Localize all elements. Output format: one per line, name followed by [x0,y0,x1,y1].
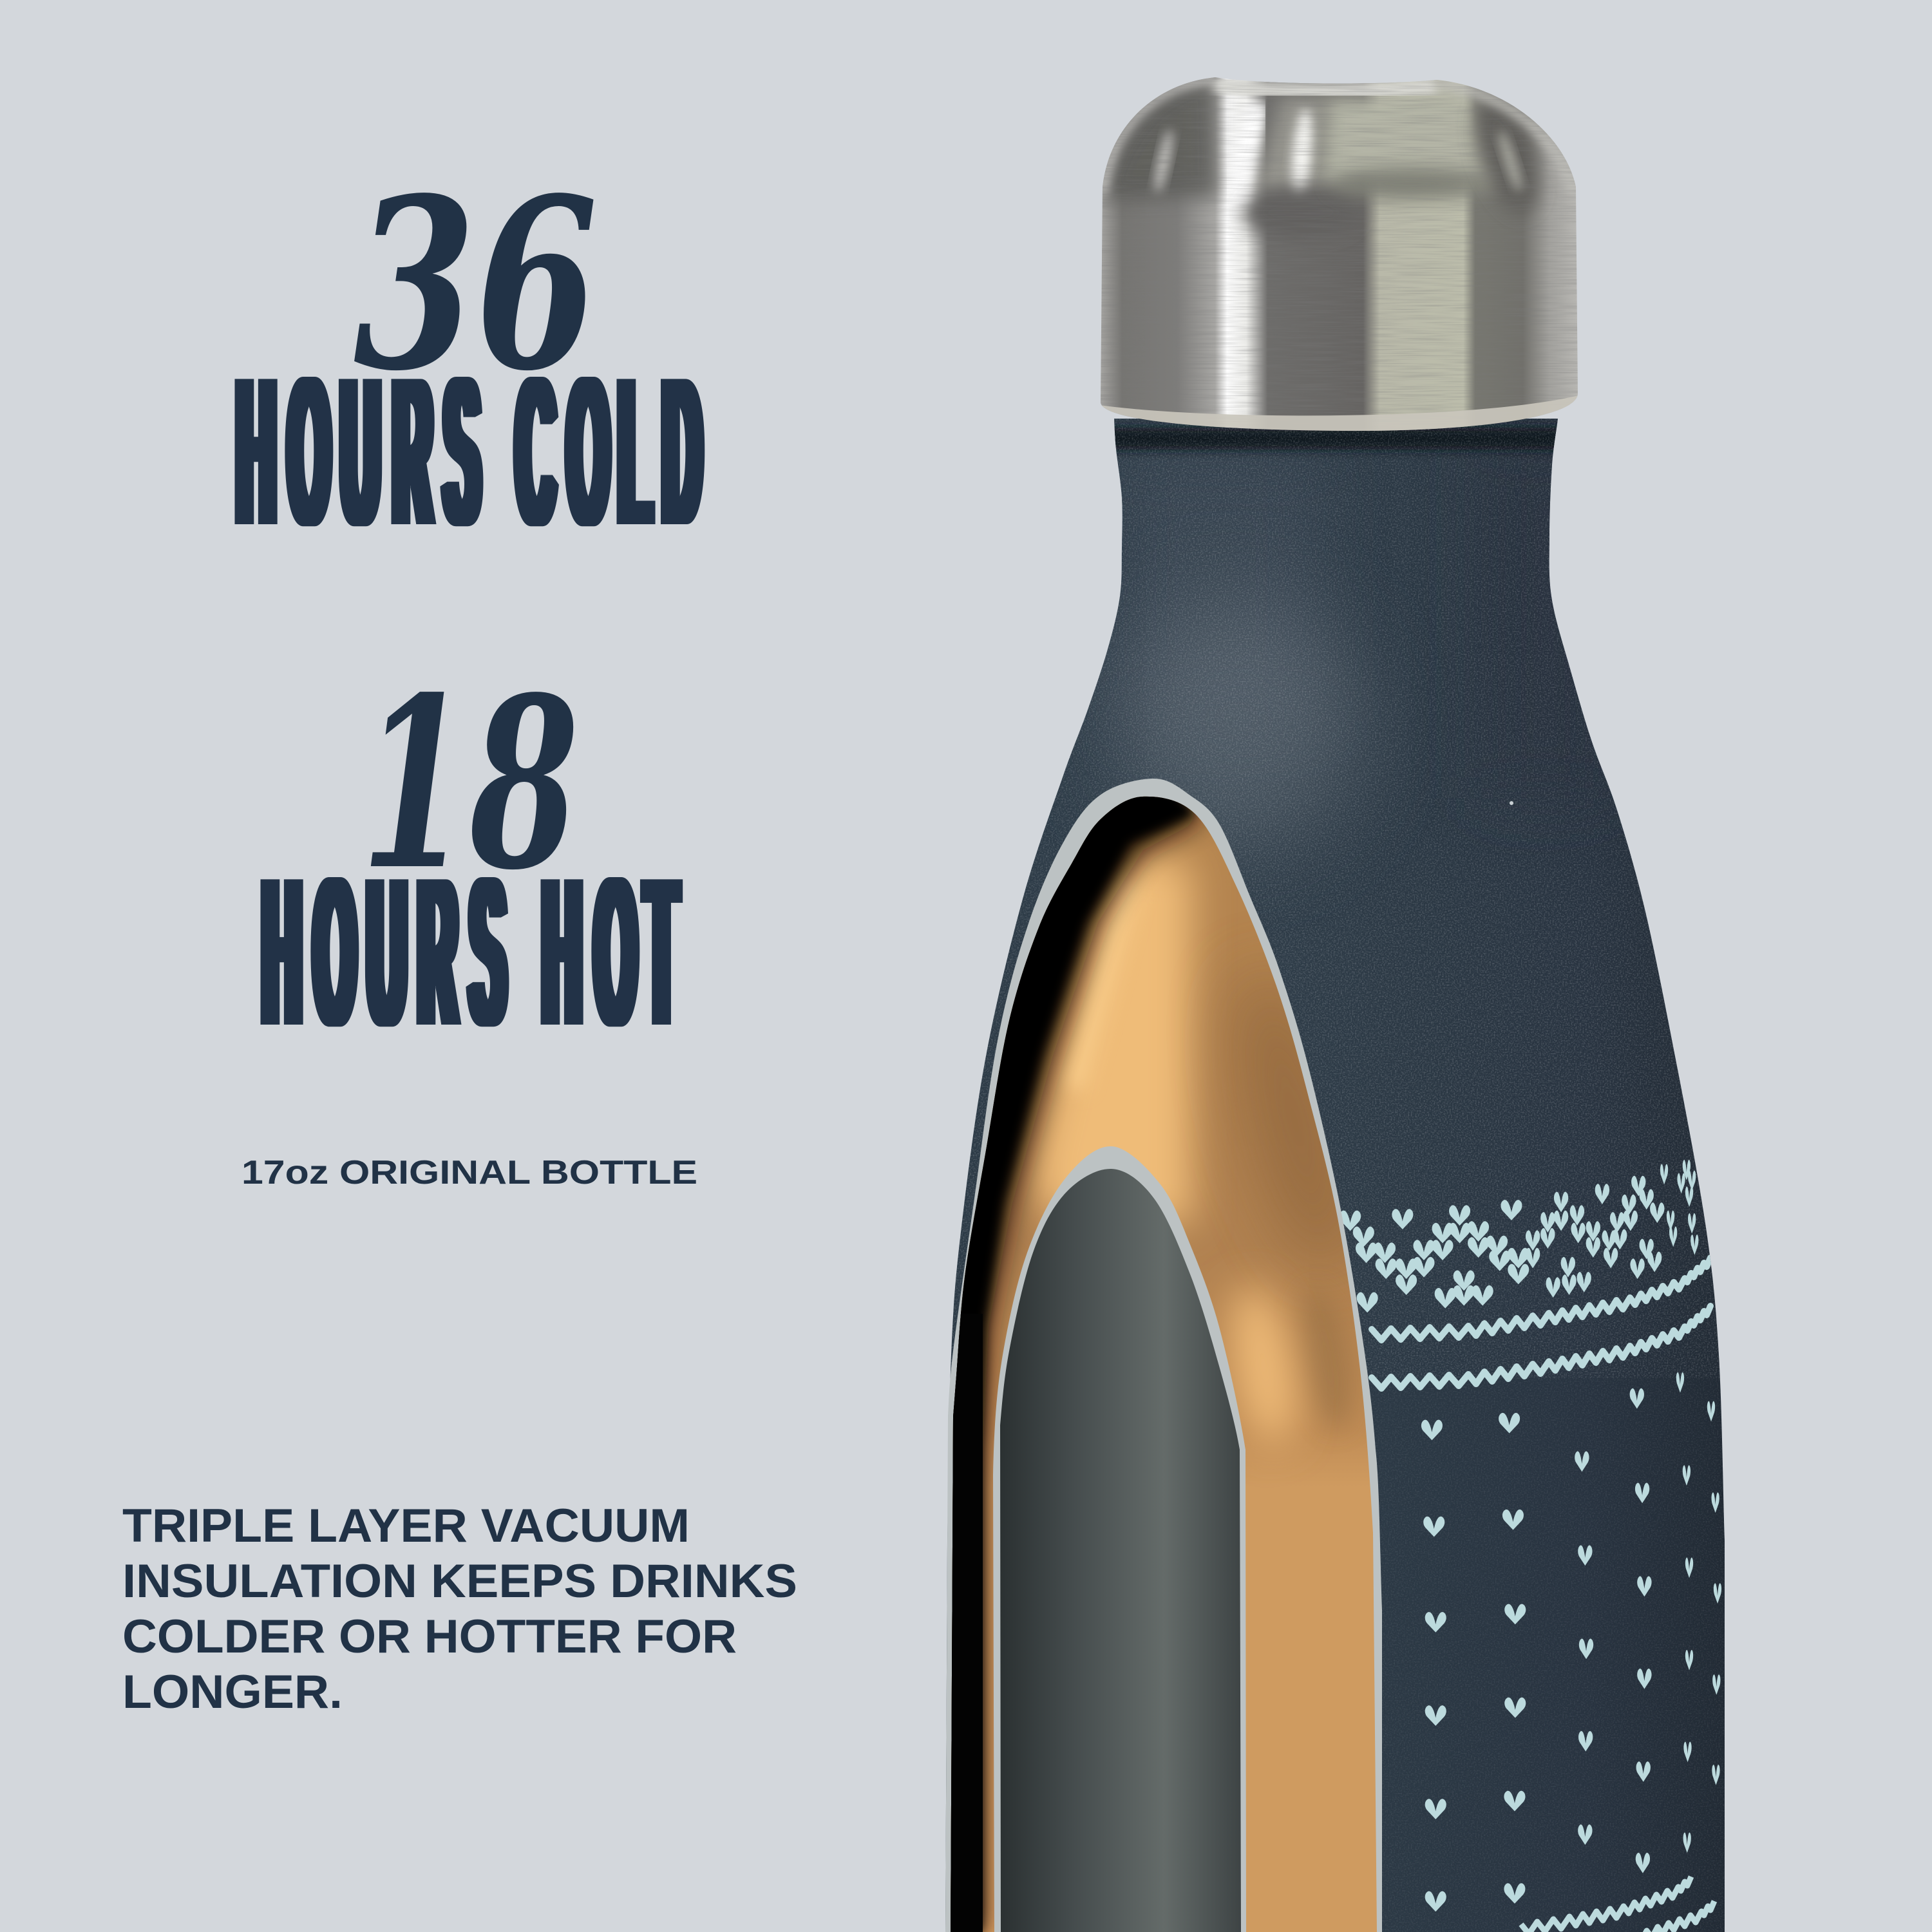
speck [1510,801,1513,805]
scattered hearts and fair isle band [1340,1160,1721,1911]
bottle illustration [902,74,1732,1932]
black gap shading [951,796,1209,1932]
stainless steel cap [1095,74,1584,438]
number: 36: 36 [354,147,598,423]
description text block: INSULATION KEEPS DRINKS [122,1555,797,1607]
cap lip [1095,394,1584,438]
heading: hours hot: HOURS HOT [263,834,677,1070]
bottle body [940,412,1732,1932]
description text block: TRIPLE LAYER VACUUM [122,1500,690,1552]
number: 18: 18 [361,646,579,922]
copper layer and black vacuum gap [951,796,1377,1932]
knit pattern [1340,1160,1721,1932]
cap dome shading [1103,77,1575,238]
inner layer rim [993,1146,1246,1932]
label: bottle size: 17oz ORIGINAL BOTTLE [242,1154,697,1191]
copper reflections [1030,850,1376,1450]
heading: hours cold: HOURS COLD [237,334,701,569]
brushed metal texture [1095,74,1584,435]
description text block: COLDER OR HOTTER FOR [122,1611,737,1663]
description text block [122,1500,797,1718]
cutaway outer rim [945,779,1382,1932]
description text block: LONGER. [122,1666,343,1718]
inner steel wall [1000,1169,1241,1932]
stitched rows [1372,1258,1714,1932]
stat: 18 hours hot [263,646,677,1070]
stat: 36 hours cold [237,147,701,569]
